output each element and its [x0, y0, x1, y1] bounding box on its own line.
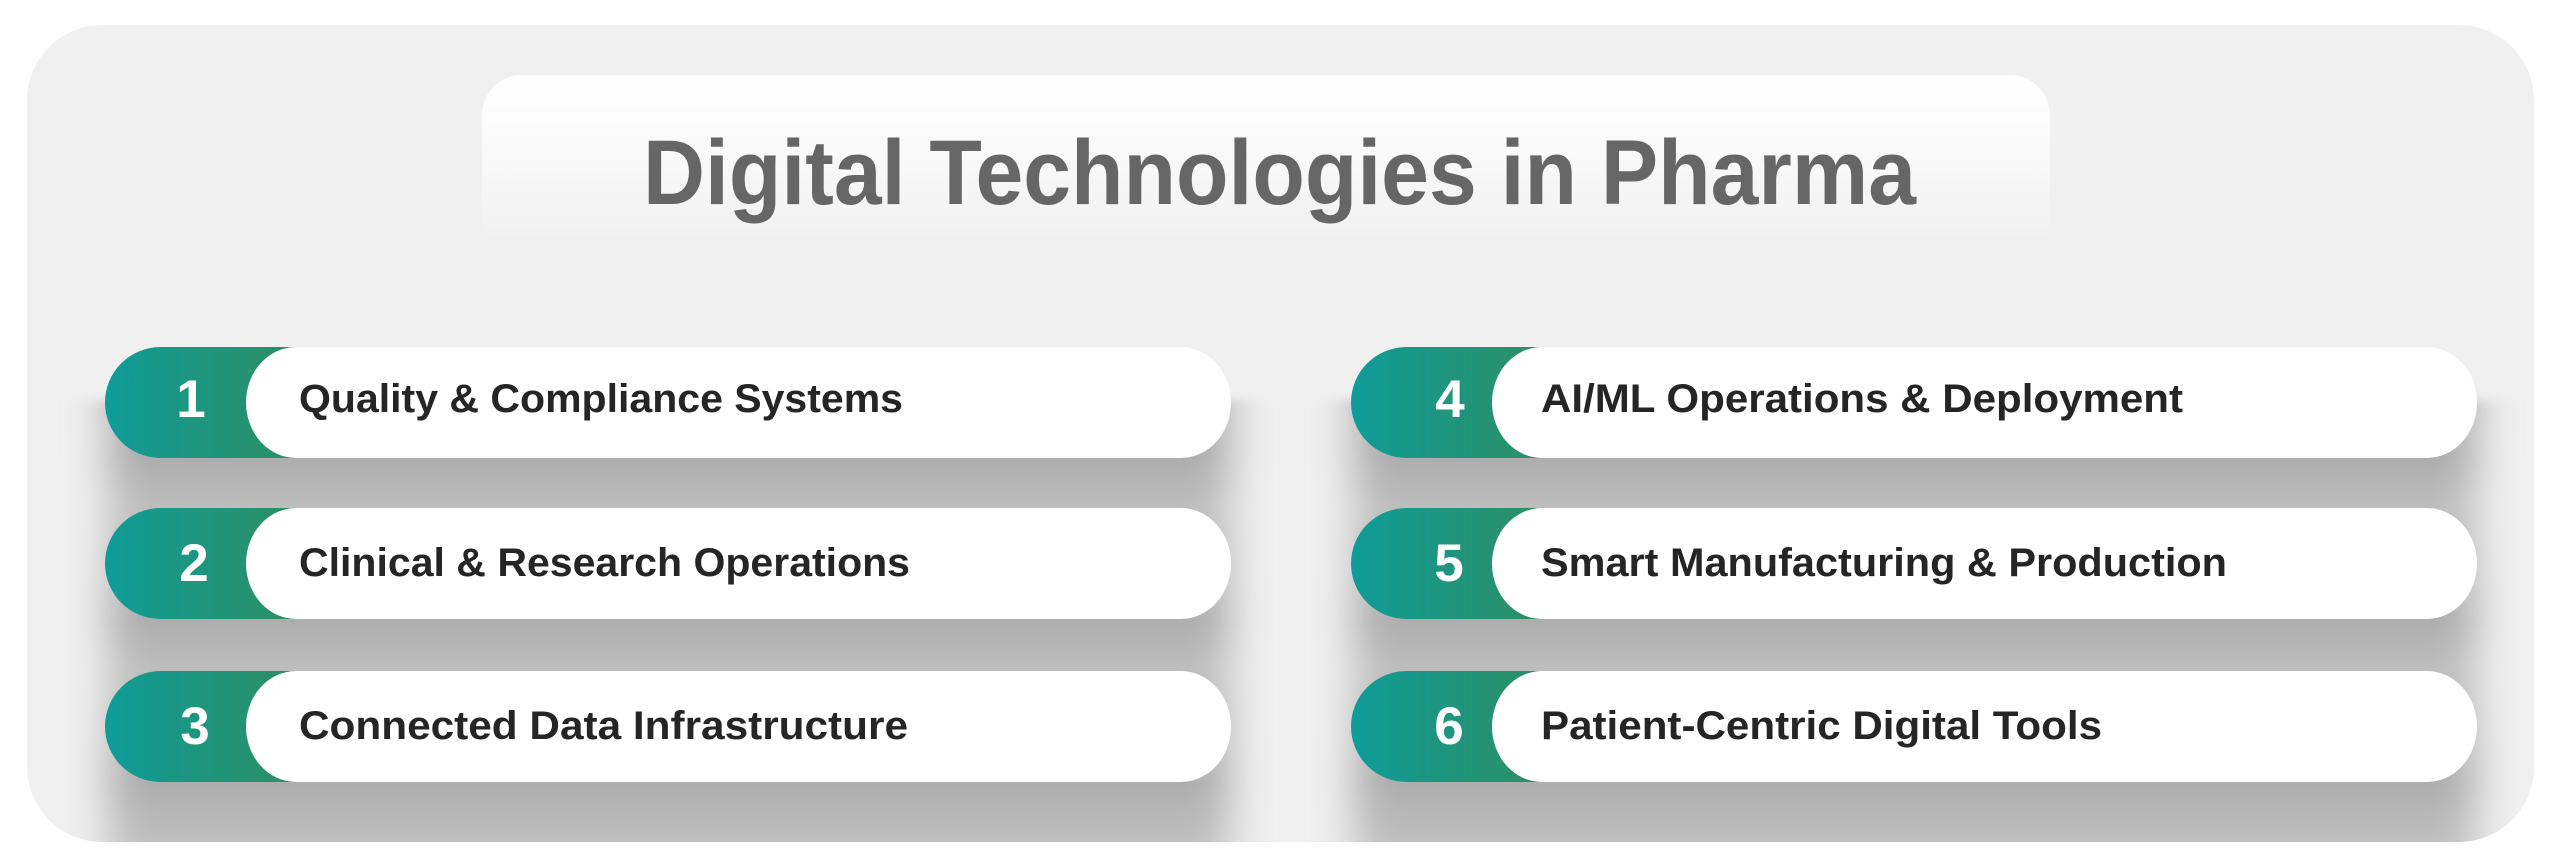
item 3: Connected Data Infrastructure: Connected Data Infrastructure [299, 704, 908, 748]
item 4: AI/ML Operations & Deployment: 4 [1435, 370, 1465, 429]
pill shadows [108, 400, 2476, 860]
item 4: AI/ML Operations & Deployment: AI/ML Operations & Deployment [1541, 377, 2183, 421]
item 3: Connected Data Infrastructure [105, 671, 1231, 782]
item 6: Patient-Centric Digital Tools: 6 [1434, 697, 1464, 756]
item 1: Quality & Compliance Systems: 1 [176, 370, 206, 429]
item 1: Quality & Compliance Systems: Quality & Compliance Systems [299, 377, 903, 421]
item 2: Clinical & Research Operations [105, 508, 1231, 619]
item 3: Connected Data Infrastructure: 3 [180, 697, 210, 756]
item 5: Smart Manufacturing & Production: 5 [1434, 534, 1464, 593]
item 6: Patient-Centric Digital Tools [1351, 671, 2477, 782]
item 6: Patient-Centric Digital Tools: Patient-Centric Digital Tools [1541, 704, 2102, 748]
item 5: Smart Manufacturing & Production: Smart Manufacturing & Production [1541, 541, 2227, 585]
title: Digital Technologies in Pharma [643, 122, 1917, 224]
item 2: Clinical & Research Operations: 2 [179, 534, 209, 593]
item 1: Quality & Compliance Systems [105, 347, 1231, 458]
item 5: Smart Manufacturing & Production [1351, 508, 2477, 619]
item 2: Clinical & Research Operations: Clinical & Research Operations [299, 541, 910, 585]
title card [482, 75, 2050, 260]
item 4: AI/ML Operations & Deployment [1351, 347, 2477, 458]
